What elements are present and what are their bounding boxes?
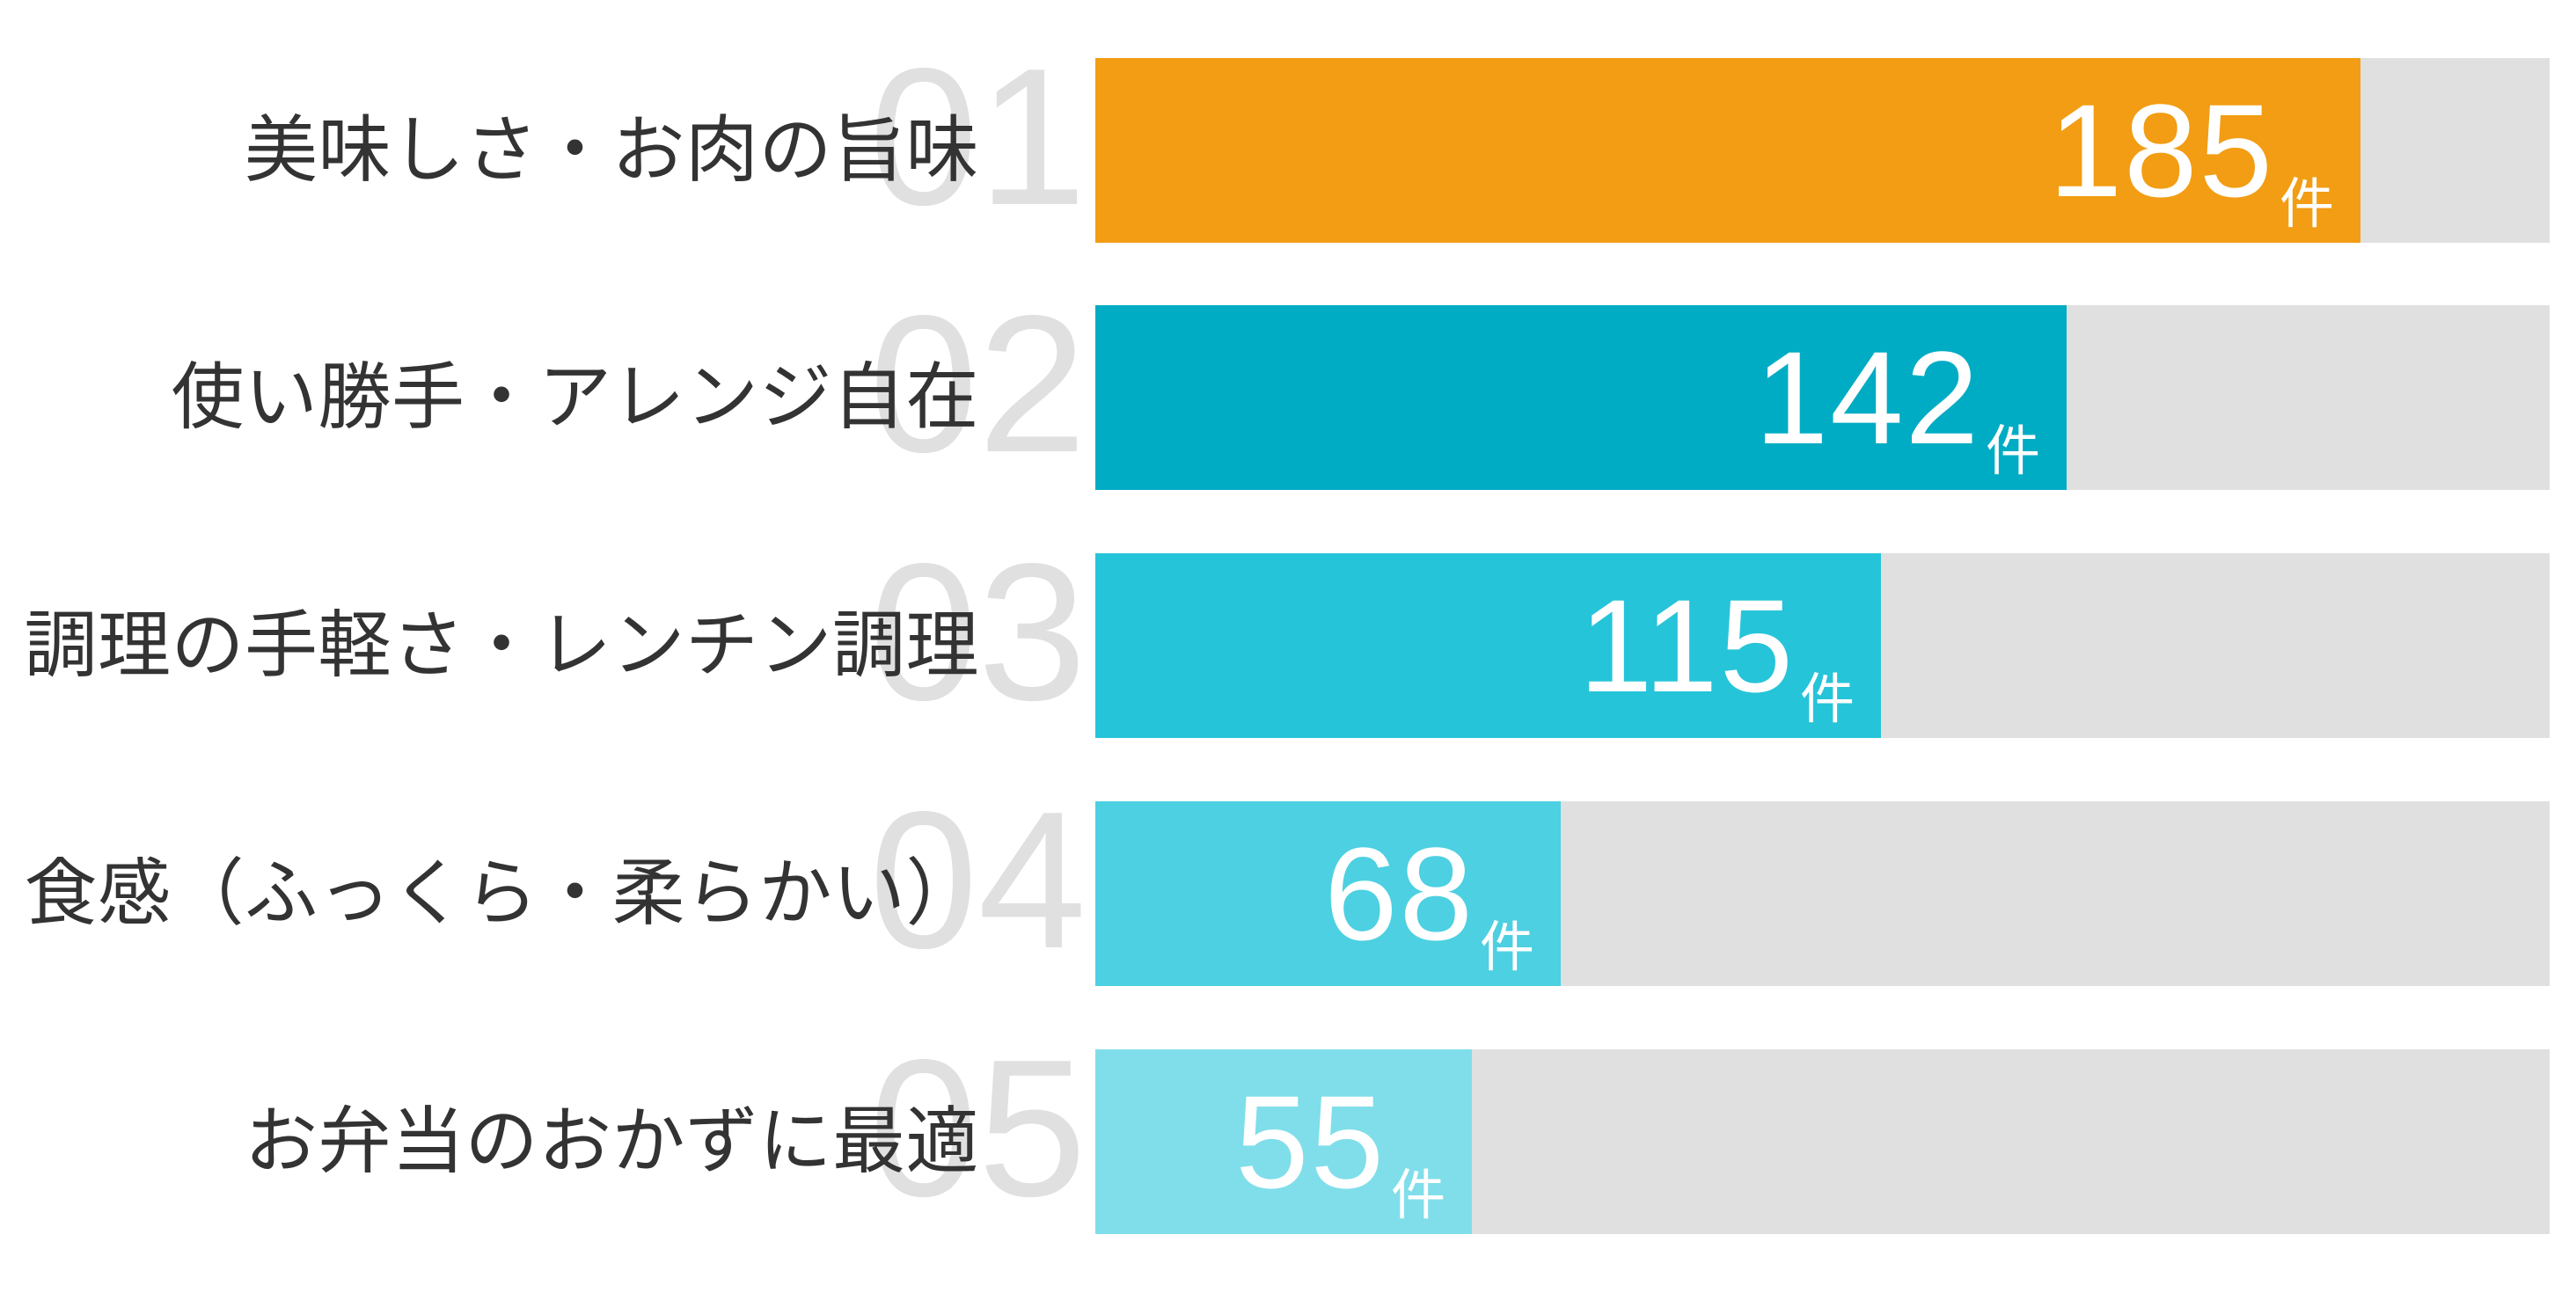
track 4 xyxy=(1095,801,2550,986)
track 5 xyxy=(1095,1049,2550,1234)
value 4: 68 xyxy=(1324,820,1475,968)
track 2 xyxy=(1095,305,2550,490)
rank 05: 05 xyxy=(869,1019,1087,1238)
label 4: 食感（ふっくら・柔らかい） xyxy=(25,852,979,934)
bar 3 xyxy=(1095,553,1881,738)
value 2: 142 xyxy=(1755,324,1980,471)
rank 04: 04 xyxy=(869,771,1087,990)
track 3 xyxy=(1095,553,2550,738)
label 3: 調理の手軽さ・レンチン調理 xyxy=(25,604,979,686)
track 1 xyxy=(1095,58,2550,243)
label 5: お弁当のおかずに最適 xyxy=(245,1100,979,1182)
value 3: 115 xyxy=(1579,572,1795,720)
row 3 xyxy=(25,523,2550,741)
value 5 xyxy=(1235,1068,1445,1226)
label 2: 使い勝手・アレンジ自在 xyxy=(171,356,979,438)
row 2 xyxy=(171,275,2550,493)
value 3: 件 xyxy=(1800,669,1855,730)
rank 02: 02 xyxy=(869,275,1087,493)
value 4 xyxy=(1324,820,1534,978)
value 1: 件 xyxy=(2280,174,2334,235)
row 5 xyxy=(245,1019,2550,1238)
value 5: 55 xyxy=(1235,1068,1386,1216)
value 5: 件 xyxy=(1391,1165,1445,1226)
row 1 xyxy=(245,28,2550,246)
rank 01: 01 xyxy=(869,28,1087,246)
bar 5 xyxy=(1095,1049,1472,1234)
rank 03: 03 xyxy=(869,523,1087,741)
bar 1 xyxy=(1095,58,2360,243)
bar 4 xyxy=(1095,801,1561,986)
row 4 xyxy=(25,771,2550,990)
value 4: 件 xyxy=(1480,917,1534,978)
label 1: 美味しさ・お肉の旨味 xyxy=(245,109,979,191)
value 1: 185 xyxy=(2049,77,2274,224)
value 2: 件 xyxy=(1986,421,2040,482)
bar 2 xyxy=(1095,305,2067,490)
